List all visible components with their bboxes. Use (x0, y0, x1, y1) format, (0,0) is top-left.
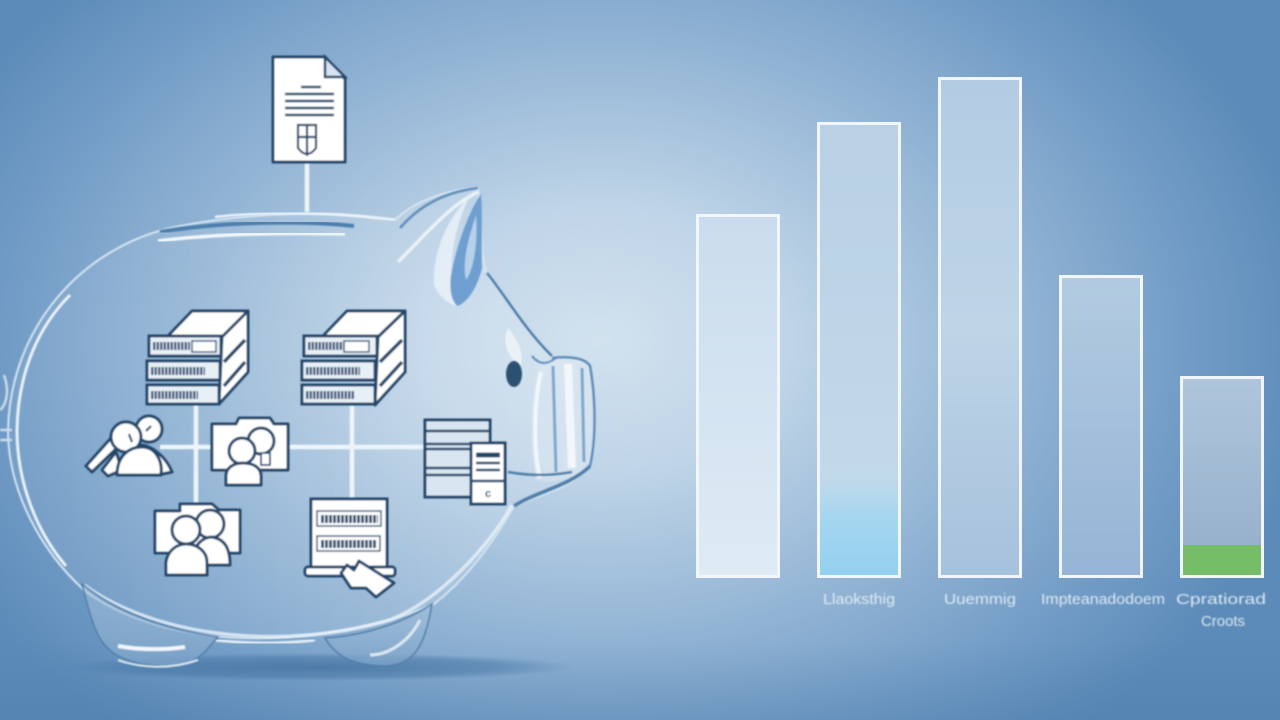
label 4: Cpratiorad (1176, 591, 1266, 608)
rim highlights (17, 295, 70, 566)
ear (398, 188, 482, 306)
icon: photo frame with people (212, 418, 288, 485)
head line (487, 273, 552, 356)
eye (506, 361, 522, 387)
coin slot (158, 213, 395, 241)
icon: people with keys (86, 416, 172, 476)
bar 3 (940, 78, 1020, 576)
pig body (8, 188, 595, 638)
icon: server stack right (302, 311, 405, 405)
label 1: Llaoksthig (823, 591, 895, 608)
bar 1 (698, 216, 778, 576)
connector lines (160, 162, 430, 510)
right foot (325, 604, 432, 666)
glass piggy bank (0, 188, 595, 667)
label 2: Uuemmig (944, 591, 1016, 608)
tail (0, 375, 12, 440)
bar labels (823, 591, 1266, 630)
snout (508, 356, 594, 506)
belly bridge (215, 640, 315, 643)
left foot (82, 584, 218, 667)
bar chart (698, 78, 1262, 576)
icon: photo frame with two people (155, 504, 240, 575)
icon: laptop with hand (305, 499, 395, 597)
label 5: Croots (1201, 613, 1245, 630)
icon: database panel: c (485, 488, 491, 500)
bar 2 (818, 124, 900, 576)
bar 5 (1182, 378, 1262, 576)
bar 4 (1060, 276, 1142, 576)
ground shadow (65, 653, 575, 681)
icon: server stack left (147, 311, 248, 404)
icon: document (273, 57, 345, 162)
floor shade (0, 640, 1280, 720)
eye highlight (505, 328, 522, 368)
icon: database panel (425, 420, 505, 504)
label 3: Impteanadodoem (1041, 591, 1165, 608)
